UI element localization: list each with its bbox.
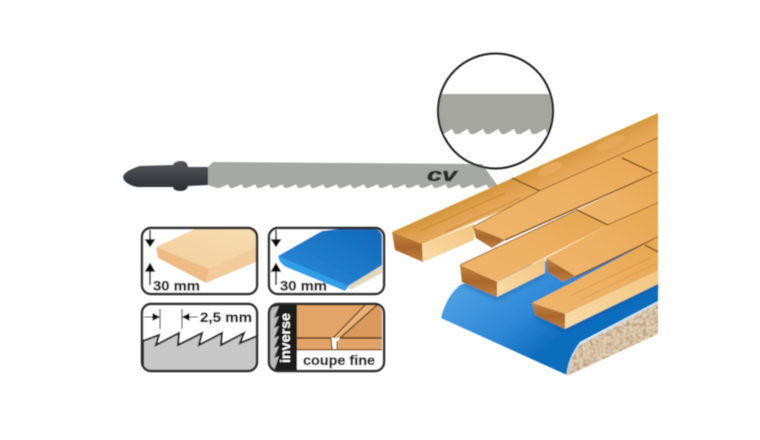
magnified teeth circle bbox=[436, 54, 556, 168]
plank shadows on board bbox=[463, 274, 658, 330]
blade shank bbox=[123, 161, 208, 191]
plank second row bbox=[473, 138, 658, 248]
label: 2,5 mm: 2,5 mm bbox=[200, 309, 252, 325]
label: inverse: inverse bbox=[277, 313, 293, 363]
icon: tooth pitch 2,5 mm bbox=[142, 304, 257, 371]
plank fourth row bbox=[546, 203, 658, 282]
label: 30 mm: 30 mm bbox=[153, 278, 200, 294]
material illustration bbox=[392, 113, 658, 376]
icon: thickness arrows bbox=[272, 230, 280, 285]
plank back long bbox=[392, 113, 658, 262]
icon: solid wood 30 mm bbox=[142, 228, 257, 294]
steel blade bbox=[208, 162, 498, 188]
reverse tooth strip bbox=[269, 304, 297, 371]
chipboard edge bbox=[567, 303, 658, 376]
icon: thickness arrows bbox=[146, 230, 154, 285]
icon: reverse fine cut bbox=[269, 304, 384, 371]
label: coupe fine: coupe fine bbox=[303, 352, 375, 368]
jigsaw blade bbox=[123, 161, 498, 191]
infographic: jigsaw blade specification bbox=[122, 52, 660, 376]
laminated board bbox=[441, 240, 658, 376]
plank third row long bbox=[460, 172, 658, 297]
blade marking: cv bbox=[427, 165, 458, 185]
plank front bbox=[532, 237, 658, 329]
icon: laminated board 30 mm bbox=[269, 228, 384, 294]
label: 30 mm: 30 mm bbox=[280, 278, 327, 294]
icon: pitch arrows bbox=[144, 309, 198, 329]
